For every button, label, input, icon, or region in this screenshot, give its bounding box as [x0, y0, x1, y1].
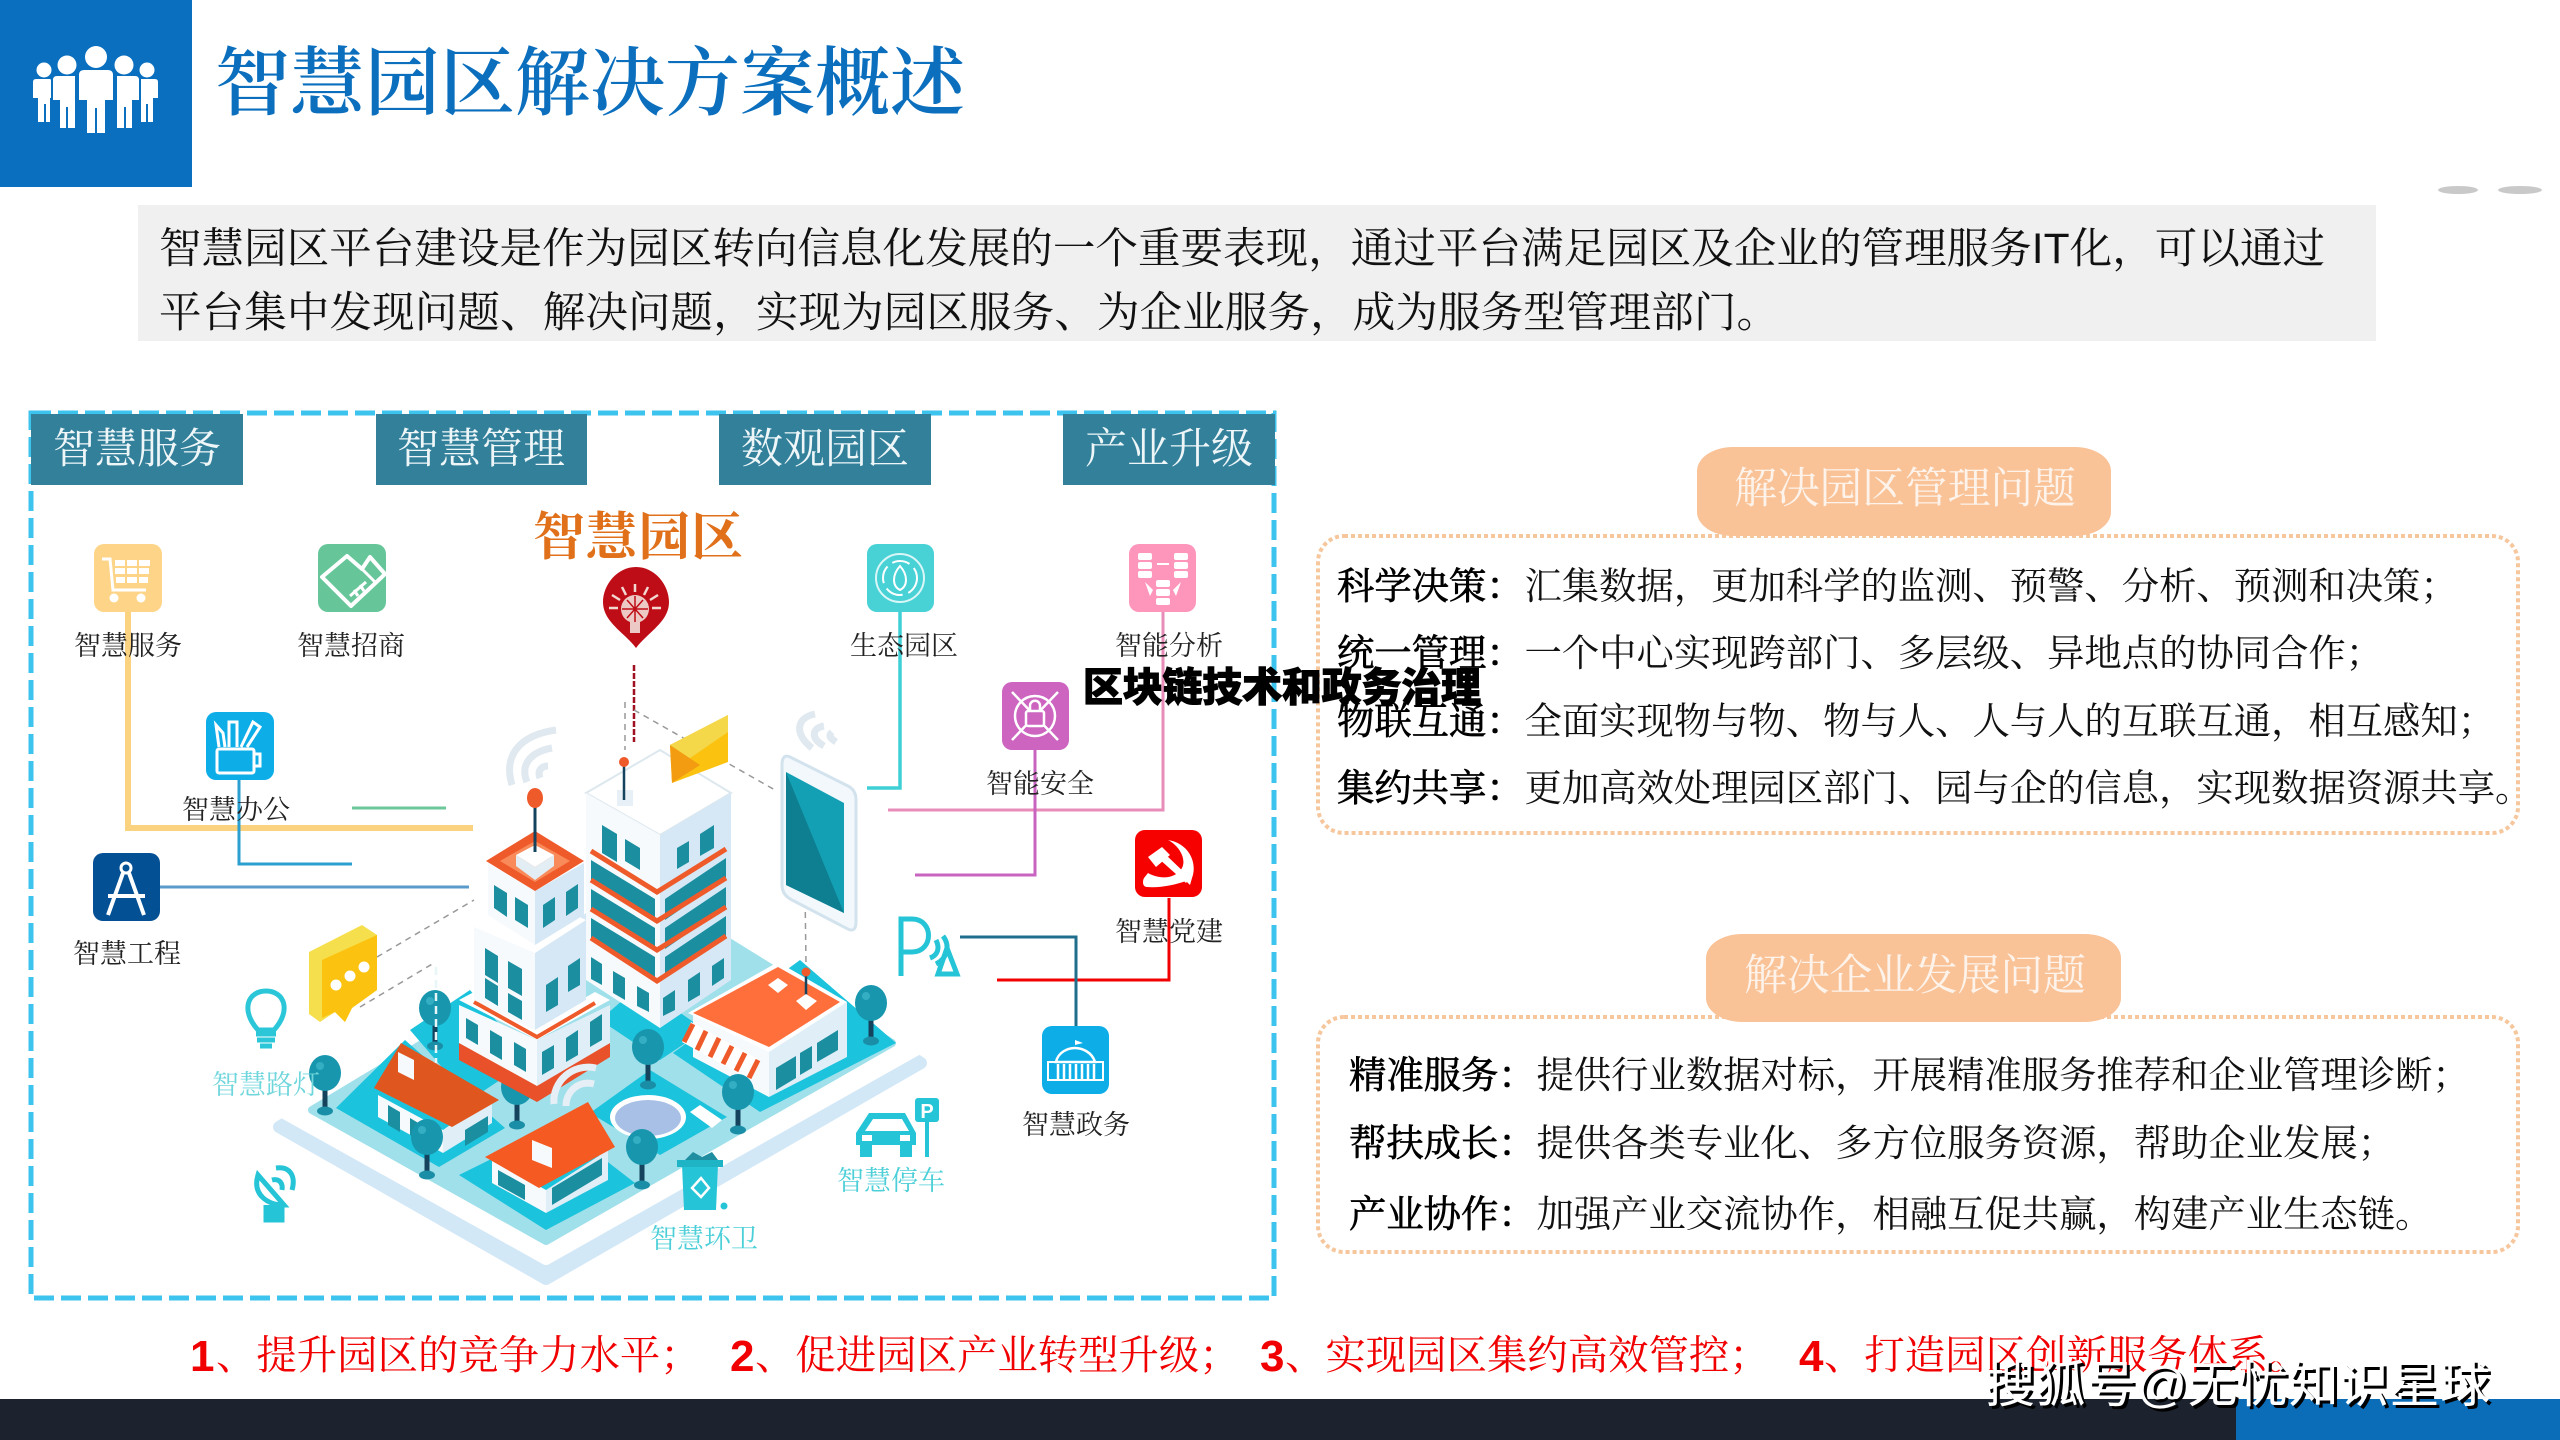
icon: light bulb — [248, 991, 284, 1046]
watermark: 搜狐号@无忧知识星球 — [1988, 1360, 2493, 1416]
icon labels: 智慧工程 — [73, 939, 181, 969]
icon: shopping cart — [94, 544, 162, 612]
tree — [855, 985, 887, 1046]
tall striped building — [586, 750, 731, 1028]
pill heading: 解决园区管理问题 — [1734, 466, 2076, 513]
icon: pencil cup — [206, 712, 274, 780]
tab headers: 数观园区 — [741, 427, 909, 473]
text rows: 集约共享： — [1337, 768, 1524, 810]
icon labels: 智慧路灯 — [212, 1070, 320, 1100]
intro text panel: 平台集中发现问题、解决问题，实现为园区服务、为企业服务，成为服务型管理部门。 — [159, 290, 1779, 337]
text rows: 产业协作： — [1349, 1194, 1536, 1236]
connector lines — [128, 612, 1169, 1026]
goals row — [190, 1332, 2309, 1381]
pill heading: 解决企业发展问题 — [1744, 953, 2086, 1000]
icon: security — [1002, 682, 1069, 750]
overlay caption: 区块链技术和政务治理 — [1083, 666, 1481, 710]
icon labels: 智慧服务 — [74, 631, 182, 661]
small wifi on the ground — [554, 1067, 596, 1106]
icon: government building — [1042, 1026, 1109, 1094]
icon labels — [73, 631, 1223, 1254]
panel: enterprise development problems — [1318, 934, 2518, 1252]
tree — [309, 1055, 341, 1116]
text rows: 汇集数据，更加科学的监测、预警、分析、预测和决策； — [1524, 566, 2458, 608]
text rows: 提供行业数据对标，开展精准服务推荐和企业管理诊断； — [1536, 1055, 2470, 1097]
panel: park management problems — [1318, 447, 2532, 833]
goals row: 1 — [190, 1332, 214, 1381]
icon: data analysis — [1129, 544, 1196, 612]
goals row: 3 — [1260, 1332, 1284, 1381]
tree — [632, 1029, 664, 1090]
icon: satellite dish — [257, 1168, 293, 1220]
text rows: 统一管理： — [1337, 633, 1524, 675]
icon: recycling bin — [677, 1152, 728, 1210]
icon: red location pin with bulb — [603, 567, 669, 648]
goals row: 2 — [730, 1332, 754, 1381]
pond — [610, 1095, 686, 1139]
goals row: 4 — [1799, 1332, 1824, 1381]
intro text panel: 智慧园区平台建设是作为园区转向信息化发展的一个重要表现，通过平台满足园区及企业的管理服务IT化，可以通过 — [159, 226, 2325, 273]
tree — [419, 990, 451, 1050]
bench — [690, 1105, 722, 1128]
icon labels: 智慧环卫 — [650, 1224, 758, 1254]
tree — [722, 1074, 754, 1134]
intro text panel — [138, 205, 2376, 341]
icon: group of people — [33, 46, 158, 133]
icon: eco park — [867, 544, 934, 612]
illustration: isometric smart park — [279, 714, 921, 1279]
text rows — [1337, 566, 2532, 810]
goals row: 、提升园区的竞争力水平； — [216, 1333, 701, 1378]
icon: parking signal — [901, 919, 957, 976]
tab headers: 智慧管理 — [397, 427, 565, 473]
pill heading — [1706, 934, 2121, 1022]
icon: party emblem — [1135, 830, 1202, 897]
text rows: 物联互通： — [1337, 701, 1524, 743]
envelope — [670, 715, 728, 783]
text rows: 科学决策： — [1337, 567, 1524, 608]
house left — [374, 1043, 499, 1153]
text rows: 全面实现物与物、物与人、人与人的互联互通，相互感知； — [1524, 701, 2495, 743]
icon labels: 智能安全 — [986, 769, 1094, 799]
heading: smart park: 智慧园区 — [533, 510, 743, 567]
icon: car and P sign: P — [920, 1101, 934, 1123]
icon labels: 生态园区 — [850, 631, 958, 661]
text rows: 加强产业交流协作，相融互促共赢，构建产业生态链。 — [1536, 1194, 2432, 1236]
header icon block — [0, 0, 192, 187]
icon: green tag — [318, 544, 386, 612]
text rows: 帮扶成长： — [1349, 1123, 1536, 1165]
text rows: 更加高效处理园区部门、园与企的信息，实现数据资源共享。 — [1524, 768, 2532, 810]
icon: compass — [93, 853, 160, 921]
icon labels: 智慧办公 — [182, 795, 290, 825]
icon: yellow chat bubble — [309, 925, 377, 1022]
icon labels: 智慧招商 — [297, 631, 405, 661]
tree — [411, 1119, 443, 1180]
tab headers: 产业升级 — [1085, 426, 1253, 473]
decorative smudges top right — [2438, 186, 2542, 194]
goals row: 、实现园区集约高效管控； — [1285, 1333, 1770, 1378]
text rows: 一个中心实现跨部门、多层级、异地点的协同合作； — [1524, 633, 2383, 675]
icon: car and P sign — [856, 1098, 939, 1157]
tab headers: 智慧服务 — [53, 427, 221, 473]
icon labels: 智慧停车 — [837, 1166, 945, 1196]
phone — [782, 756, 856, 930]
tree — [626, 1129, 658, 1190]
tree — [501, 1069, 533, 1130]
tab headers — [31, 414, 1275, 485]
pill heading — [1697, 447, 2111, 536]
goals row: 、打造园区创新服务体系。 — [1824, 1333, 2309, 1378]
text rows: 精准服务： — [1349, 1055, 1536, 1097]
icon labels: 智慧党建 — [1115, 917, 1223, 947]
text rows — [1349, 1055, 2470, 1236]
tablet base — [279, 877, 921, 1279]
stepped tower with orange roof — [459, 788, 610, 1102]
wifi icons — [510, 714, 836, 785]
footer bar — [0, 1399, 2560, 1440]
goals row: 、促进园区产业转型升级； — [755, 1333, 1240, 1378]
title: 智慧园区解决方案概述 — [215, 43, 968, 126]
panel: smart park diagram frame — [31, 413, 1274, 1298]
icon labels: 智慧政务 — [1022, 1110, 1130, 1140]
icon labels: 智能分析 — [1115, 631, 1223, 661]
orange roof shop — [682, 962, 847, 1097]
watermark: 搜狐号@无忧知识星球 — [1985, 1357, 2490, 1413]
text rows: 提供各类专业化、多方位服务资源，帮助企业发展； — [1536, 1123, 2395, 1165]
house right — [485, 1102, 615, 1213]
